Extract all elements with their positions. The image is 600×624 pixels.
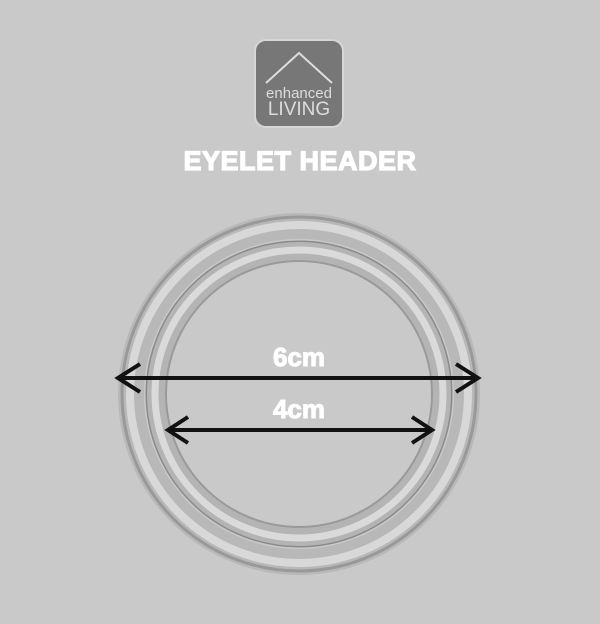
title: EYELET HEADER [183, 146, 417, 176]
label 6cm: 6cm [273, 342, 325, 372]
arrow: 4cm [168, 417, 432, 443]
ring [122, 217, 476, 571]
logo [254, 39, 344, 128]
arrow: 6cm [118, 364, 478, 392]
label 4cm: 4cm [273, 394, 325, 424]
logo: LIVING [268, 99, 330, 120]
logo: enhanced [266, 85, 332, 102]
